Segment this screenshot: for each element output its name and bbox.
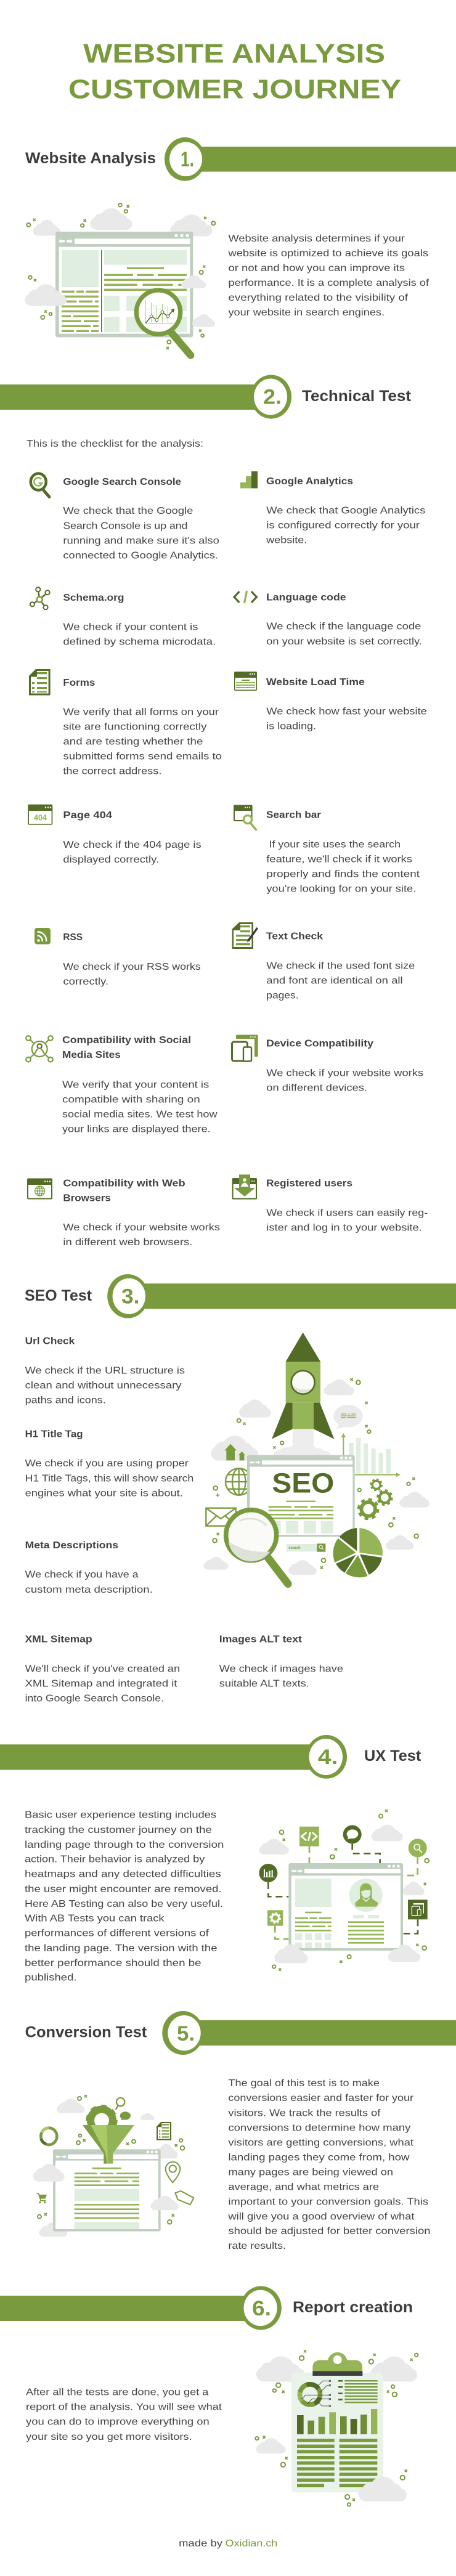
panel: Forms: [29, 669, 222, 777]
panel: Website Load Time: [234, 672, 427, 732]
footer: made by: made by: [179, 2538, 222, 2549]
heading: Browsers: [63, 1193, 111, 1203]
section header: 3 SEO Test: 3.: [121, 1285, 139, 1309]
text: conversion test description: important to your conversion goals. This: [228, 2196, 428, 2207]
panel: Website Load Time: Website Load Time: [266, 677, 365, 688]
icon: social network: [26, 1036, 53, 1062]
body text: We check if the 404 page is: [63, 840, 202, 850]
panel: Google Analytics: [240, 471, 425, 546]
body text: your links are displayed there.: [62, 1124, 211, 1135]
text: conversion test description: will give you a good overview of what: [227, 2211, 415, 2222]
section header: 6 Report creation: [0, 2286, 413, 2330]
title: [68, 38, 401, 105]
body text: We check if your RSS works: [63, 962, 201, 972]
icon: speech bubble: [333, 1405, 363, 1429]
panel: Images ALT text: Images ALT text: [219, 1635, 303, 1645]
donut chart with leader lines: [299, 2380, 331, 2407]
panel: Meta Descriptions: We check if you have a: [25, 1570, 139, 1580]
text: conversion test description: rate results.: [228, 2241, 286, 2251]
text: UX test description: the landing page. The version with the: [25, 1943, 218, 1954]
body text: in different web browsers.: [63, 1237, 192, 1248]
panel: XML Sitemap: XML Sitemap: [25, 1635, 92, 1645]
footer: made by: Oxidian.ch: [226, 2538, 277, 2549]
panel: Search bar: Search bar: [266, 810, 321, 820]
text: report description: After all the tests are done, you get a: [26, 2387, 209, 2398]
icon: magnifier with G: [31, 473, 49, 497]
section header: 1 Website Analysis: [25, 137, 456, 181]
body text: [266, 505, 425, 546]
body text: We check if the language code: [266, 622, 421, 632]
panel: Url Check: Url Check: [25, 1336, 75, 1347]
panel: Url Check: clean and without unnecessary: [25, 1380, 181, 1391]
panel: H1 Title Tag: engines what your site is about.: [25, 1488, 183, 1498]
legend lines: [338, 2380, 378, 2403]
text: conversion test description: conversions to determine how many: [228, 2123, 410, 2133]
text: UX test description: heatmaps and any detected difficulties: [25, 1869, 221, 1880]
illustration: conversion funnel: [33, 2095, 193, 2237]
icon: document: [157, 2122, 171, 2140]
body text: [266, 622, 422, 647]
body text: website.: [266, 535, 307, 546]
panel: Url Check: paths and icons.: [25, 1396, 106, 1406]
icon: gear: [88, 2107, 116, 2134]
icon: magnifier: [226, 1510, 288, 1584]
text: UX test description: the user might encounter are removed.: [25, 1884, 222, 1895]
icon: small magnifier: [116, 2098, 124, 2110]
section header: 5 Conversion Test: 5.: [177, 2022, 195, 2046]
text: website analysis intro: website is optimized to achieve its goals: [227, 248, 428, 259]
body text: ister and log in to your website.: [266, 1222, 422, 1233]
text: website analysis intro: everything related to the visibility of: [228, 293, 409, 303]
text: conversion test description: The goal of this test is to make: [228, 2078, 380, 2089]
body text: [266, 1068, 423, 1094]
text: UX test description: published.: [25, 1973, 77, 1983]
section header: 1 Website Analysis: Website Analysis: [25, 150, 156, 167]
bar chart: [341, 1433, 401, 1477]
body text: the correct address.: [63, 766, 161, 777]
panel: Registered users: Registered users: [266, 1178, 352, 1189]
panel: Registered users: [232, 1174, 428, 1233]
icon: schema nodes: [30, 587, 50, 609]
icon: analytics bars: [240, 471, 258, 488]
text: website analysis intro: your website in search engines.: [228, 307, 385, 318]
body text: We check if your content is: [63, 622, 198, 632]
body text: and font are identical on all: [266, 976, 403, 986]
icon: up arrows: [224, 1444, 245, 1460]
body text: displayed correctly.: [63, 855, 159, 865]
section header: 4 UX Test: [0, 1735, 421, 1779]
icon: browser with user arrow: [232, 1174, 257, 1200]
text: conversion test description: visitors are getting conversions, what: [228, 2138, 414, 2148]
text: conversion test description: landing pages they come from, how: [228, 2152, 410, 2163]
panel: RSS: RSS: [63, 932, 83, 943]
illustration: UX browser with user profile: [259, 1810, 429, 1971]
icon: code brackets: [234, 591, 256, 603]
icon: RSS: [35, 928, 51, 945]
panel: RSS: [35, 928, 201, 987]
icon: devices: [232, 1035, 258, 1061]
section header: 4 UX Test: 4.: [318, 1745, 338, 1769]
icon: chart pin: [259, 1864, 277, 1882]
panel: XML Sitemap: We'll check if you've created an: [25, 1664, 180, 1674]
body text: correctly.: [63, 977, 108, 987]
panel: XML Sitemap: into Google Search Console.: [25, 1694, 164, 1704]
section header: 2 Technical Test: [0, 375, 412, 419]
body text: on different devices.: [266, 1083, 367, 1094]
panel: Device Compatibility: [232, 1035, 423, 1094]
body text: If your site uses the search: [269, 839, 401, 850]
text: conversion test description: conversions easier and faster for your: [228, 2093, 414, 2103]
section header: 6 Report creation: Report creation: [293, 2299, 413, 2316]
body text: We check how fast your website: [266, 706, 427, 717]
panel: Device Compatibility: Device Compatibility: [266, 1039, 373, 1049]
section header: 3 SEO Test: [25, 1274, 456, 1318]
icon: gears: [359, 1479, 392, 1519]
icon: price tag: [175, 2191, 193, 2204]
body text: defined by schema microdata.: [63, 637, 216, 648]
connector lines: [268, 1843, 418, 1939]
section header: 3 SEO Test: SEO Test: [25, 1287, 92, 1304]
section header: 2 Technical Test: Technical Test: [302, 388, 412, 405]
bar chart: [297, 2409, 377, 2434]
icon: location pin: [166, 2162, 180, 2182]
body text: We check that Google Analytics: [266, 505, 425, 516]
icon: 404 browser: [28, 805, 52, 825]
panel: Meta Descriptions: [25, 1540, 153, 1595]
browser window: [247, 1455, 355, 1537]
text: UX test description: better performance should then be: [25, 1958, 202, 1969]
panel: Images ALT text: [219, 1635, 343, 1689]
text: conversion test description: visitors. We track the results of: [228, 2108, 381, 2118]
panel: Forms: Forms: [63, 678, 95, 688]
icon: browser window: [234, 672, 257, 691]
panel: Search bar: [234, 805, 420, 895]
body text: We check if your website works: [63, 1222, 220, 1233]
body text: pages.: [266, 991, 299, 1001]
icon: document with pencil: [232, 922, 258, 949]
body text: submitted forms send emails to: [63, 752, 222, 762]
icon: browser with magnifier: [234, 805, 256, 829]
icon: shopping cart: [36, 2193, 47, 2203]
icon: funnel: [83, 2125, 134, 2164]
text: conversion test description: [227, 2078, 430, 2251]
icon: 404 browser: 404: [34, 813, 47, 822]
icon: devices sign: [408, 1899, 428, 1919]
panel: H1 Title Tag: H1 Title Tag: [25, 1429, 83, 1439]
text: UX test description: action. Their behavior is analyzed by: [25, 1855, 205, 1865]
text: conversion test description: many pages are being viewed on: [228, 2167, 393, 2177]
icon: search pin: [409, 1839, 427, 1857]
panel: Page 404: Page 404: [63, 810, 112, 821]
body text: We verify that your content is: [62, 1079, 209, 1090]
title: CUSTOMER JOURNEY: [68, 74, 401, 105]
text: UX test description: landing page through to the conversion: [25, 1840, 224, 1850]
icon: user avatar: [349, 1879, 383, 1912]
section header: 5 Conversion Test: [25, 2011, 456, 2055]
icon: rocket: [272, 1333, 334, 1439]
text: UX test description: tracking the customer journey on the: [25, 1825, 212, 1835]
text: checklist intro: This is the checklist for the analysis:: [26, 439, 203, 449]
body text: [266, 1208, 428, 1233]
section header: 1 Website Analysis: 1.: [181, 148, 194, 171]
title: WEBSITE ANALYSIS: [83, 38, 385, 69]
icon: envelope: [206, 1508, 236, 1526]
panel: Compatibility with Social Media Sites: [26, 1035, 218, 1135]
icon: speech bubble: [120, 2111, 131, 2120]
body text: social media sites. We test how: [62, 1109, 218, 1119]
body text: We check if the used font size: [266, 961, 415, 971]
browser window: [53, 2149, 161, 2232]
body text: We check that the Google: [63, 506, 193, 516]
icon: magnifier: [136, 290, 190, 356]
panel: Meta Descriptions: custom meta description.: [25, 1585, 153, 1595]
body text: and are testing whether the: [63, 736, 203, 747]
illustration: report clipboard: [255, 2350, 418, 2506]
icon: clipboard clip: [312, 2352, 362, 2376]
panel: Text Check: Text Check: [266, 932, 323, 941]
body text: compatible with sharing on: [62, 1094, 200, 1105]
body text: you're looking for on your site.: [266, 884, 416, 895]
body text: is configured correctly for your: [266, 521, 420, 531]
panel: Google Search Console: Google Search Console: [63, 477, 181, 487]
panel: Language code: [234, 591, 422, 647]
panel: H1 Title Tag: H1 Title Tags, this will show search: [25, 1473, 193, 1484]
heading: [62, 1035, 191, 1060]
heading: Compatibility with Social: [62, 1035, 191, 1046]
panel: Google Analytics: Google Analytics: [266, 476, 353, 487]
illustration: browser with magnifier and chart: [25, 203, 215, 356]
body text: We verify that all forms on your: [63, 707, 219, 717]
clipboard page: [291, 2373, 383, 2492]
text: report description: report of the analysis. You will see what: [26, 2402, 222, 2413]
panel: Google Search Console: [31, 473, 219, 561]
panel: XML Sitemap: XML Sitemap and integrated it: [25, 1678, 177, 1689]
panel: H1 Title Tag: [25, 1429, 193, 1498]
body text: [63, 840, 202, 865]
panel: Schema.org: [30, 587, 216, 648]
body text: [63, 962, 201, 987]
footer: made by: [179, 2538, 277, 2549]
body text: on your website is set correctly.: [266, 636, 422, 647]
icon: browser with globe: [27, 1178, 52, 1199]
body text: [63, 1222, 220, 1248]
icon: form document: [29, 669, 51, 695]
panel: Text Check: [232, 922, 415, 1001]
text: website analysis intro: or not and how you can improve its: [228, 263, 405, 274]
panel: Schema.org: Schema.org: [63, 593, 124, 603]
text: report description: your site so you get more visitors.: [26, 2432, 192, 2442]
text lines: [297, 2439, 377, 2487]
body text: We check if users can easily reg-: [266, 1208, 428, 1218]
text: website analysis intro: [227, 234, 430, 318]
panel: Images ALT text: We check if images have: [219, 1664, 343, 1674]
text: UX test description: Here AB Testing can also be very useful.: [25, 1899, 223, 1909]
text: UX test description: Basic user experience testing includes: [25, 1810, 216, 1821]
text: website analysis intro: performance. It is a complete analysis of: [228, 278, 430, 288]
heading: Media Sites: [62, 1050, 121, 1060]
text: UX test description: With AB Tests you can track: [25, 1914, 165, 1924]
panel: Meta Descriptions: Meta Descriptions: [25, 1540, 118, 1551]
body text: [62, 1079, 218, 1135]
text: UX test description: [25, 1810, 224, 1983]
text: website analysis intro: Website analysis determines if your: [228, 234, 405, 244]
panel: H1 Title Tag: We check if you are using proper: [25, 1458, 189, 1469]
text: conversion test description: average, and what metrics are: [228, 2182, 379, 2192]
text: report description: [26, 2387, 222, 2442]
icon: gear sign: [267, 1910, 283, 1926]
body text: connected to Google Analytics.: [63, 551, 218, 561]
icon: donut chart: [41, 2128, 57, 2145]
body text: site are functioning correctly: [63, 721, 207, 732]
body text: [266, 961, 415, 1001]
body text: [63, 506, 219, 561]
section header: 5 Conversion Test: Conversion Test: [25, 2023, 147, 2041]
body text: [266, 706, 427, 732]
search box: [287, 1543, 325, 1552]
panel: Images ALT text: suitable ALT texts.: [219, 1678, 309, 1689]
icon: code sign: [299, 1827, 319, 1847]
icon: globe: [226, 1468, 252, 1495]
search box: search: [288, 1546, 301, 1550]
illustration: SEO rocket: [203, 1333, 430, 1584]
section header: 6 Report creation: 6.: [252, 2297, 271, 2320]
heading: [63, 1178, 185, 1203]
heading: Compatibility with Web: [63, 1178, 185, 1189]
panel: Page 404: [28, 805, 202, 865]
body text: [63, 707, 222, 777]
text: conversion test description: should be adjusted for better conversion: [228, 2226, 430, 2237]
panel: Url Check: [25, 1336, 185, 1406]
pie chart: [333, 1528, 383, 1577]
body text: feature, we'll check if it works: [266, 854, 412, 864]
panel: Language code: Language code: [266, 592, 346, 603]
panel: Url Check: We check if the URL structure is: [25, 1365, 185, 1376]
body text: is loading.: [266, 721, 316, 732]
body text: [63, 622, 216, 648]
body text: running and make sure it's also: [63, 535, 219, 546]
body text: [266, 839, 420, 895]
panel: Compatibility with Web Browsers: [27, 1178, 220, 1248]
browser window: SEO: [272, 1468, 334, 1499]
body text: properly and finds the content: [266, 869, 420, 880]
body text: We check if your website works: [266, 1068, 423, 1078]
section header: 2 Technical Test: 2.: [263, 386, 282, 409]
text: UX test description: performances of different versions of: [25, 1928, 209, 1939]
browser window: [288, 1863, 403, 1951]
icon: chat pin: [343, 1825, 362, 1843]
panel: XML Sitemap: [25, 1635, 180, 1704]
body text: Search Console is up and: [63, 521, 187, 531]
text: report description: you can do to improve everything on: [26, 2417, 210, 2428]
section header: 4 UX Test: UX Test: [364, 1747, 421, 1765]
